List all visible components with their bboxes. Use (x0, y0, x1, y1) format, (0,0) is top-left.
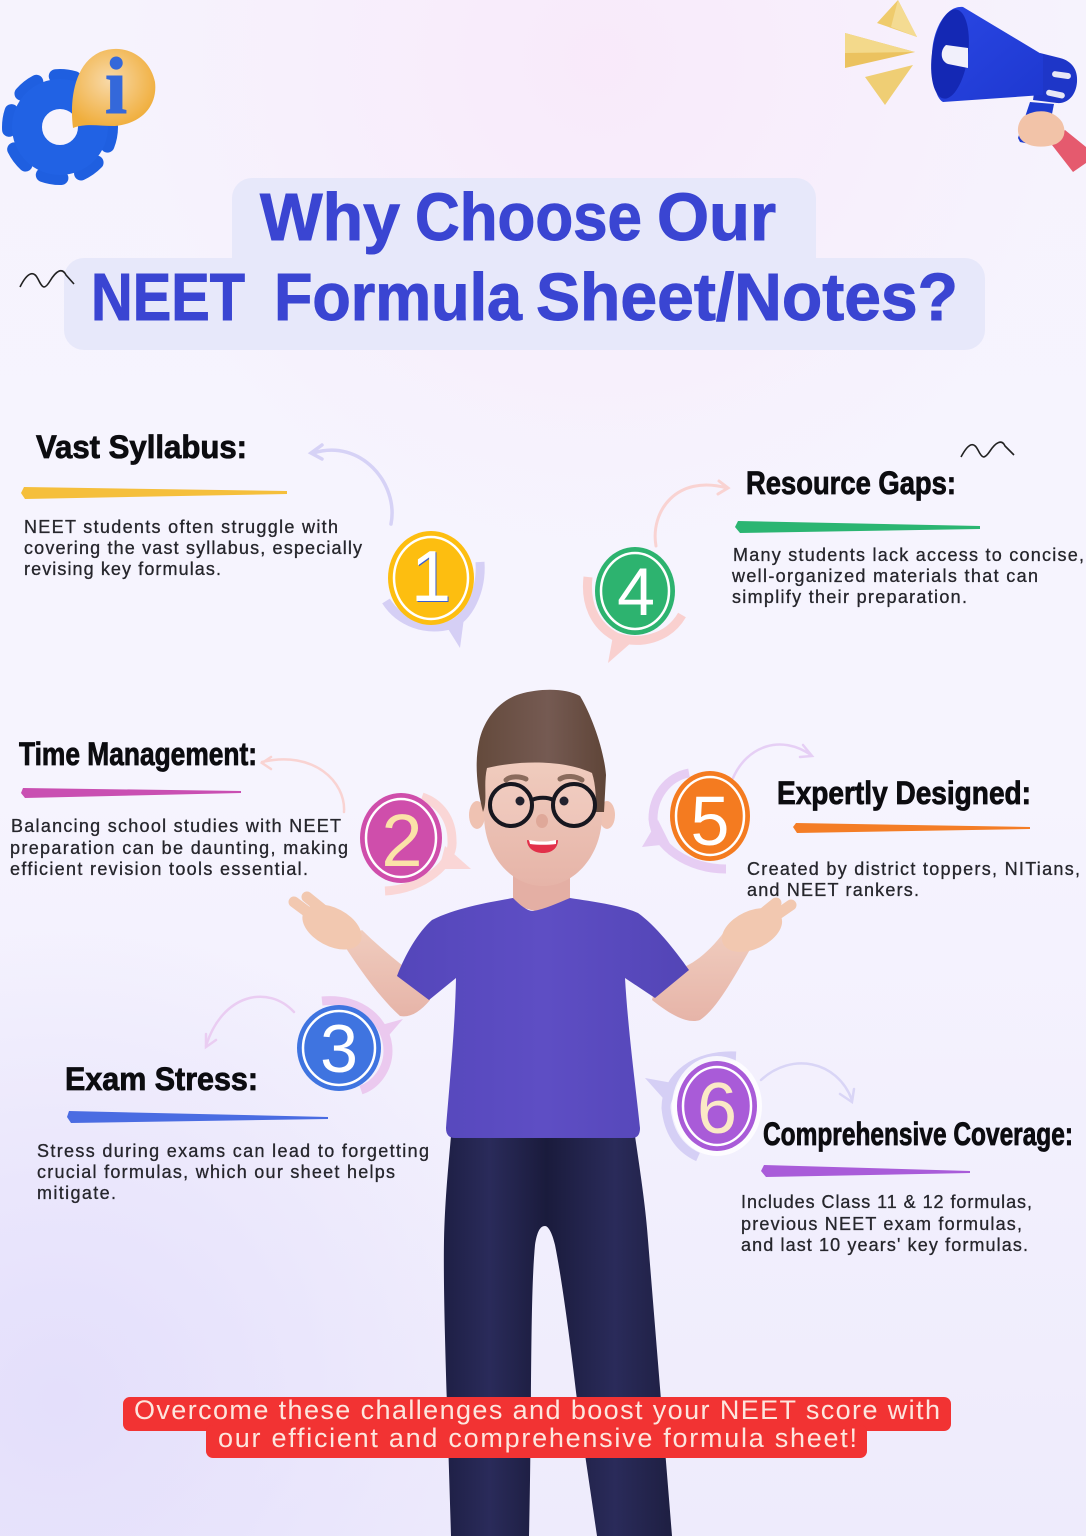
footer banner (123, 1395, 951, 1458)
panel: resource gaps (731, 465, 1084, 607)
badge 4 (587, 547, 682, 663)
underline (21, 788, 241, 798)
heading: Time Management: (19, 736, 257, 772)
title: Why (260, 180, 400, 255)
body text: Stress during exams can lead to forgetting (37, 1141, 429, 1161)
arrow 6 (761, 1063, 854, 1102)
body text: revising key formulas. (24, 559, 221, 579)
mouth (527, 840, 558, 853)
cone (932, 7, 1043, 102)
badge 6 (645, 1056, 762, 1157)
badge 2: 2 (381, 799, 423, 882)
body text: and last 10 years' key formulas. (741, 1235, 1028, 1255)
right arm (652, 932, 752, 1021)
badge 1 (386, 531, 480, 648)
body text: preparation can be daunting, making (10, 838, 348, 858)
panel: exam stress (37, 1061, 429, 1203)
neck (513, 875, 570, 913)
eyes (516, 796, 524, 806)
face (484, 760, 602, 886)
body text: crucial formulas, which our sheet helps (37, 1162, 395, 1182)
heading background pills (64, 178, 985, 350)
handle (1018, 102, 1054, 144)
title: Choose (415, 180, 642, 255)
nose (536, 814, 548, 828)
body text (731, 545, 1084, 607)
badge 4: 4 (617, 554, 655, 630)
title: NEET (91, 260, 245, 335)
eyebrows (506, 776, 582, 780)
icon: gear with info bubble (9, 43, 155, 178)
right hand (715, 899, 791, 961)
body text: Includes Class 11 & 12 formulas, (741, 1192, 1032, 1212)
glasses (490, 784, 595, 826)
title (91, 180, 958, 335)
badge 6: 6 (697, 1069, 737, 1149)
squiggle right (961, 442, 1014, 457)
left hand (294, 895, 369, 959)
panel: time management (10, 736, 348, 879)
ears (469, 801, 485, 829)
body text: well-organized materials that can (731, 566, 1038, 586)
hair (477, 690, 606, 812)
sound rays (845, 0, 917, 105)
icon: gear with info bubble: i (105, 43, 127, 131)
left arm (342, 930, 430, 1016)
arrow 3 (206, 997, 294, 1047)
shirt (397, 898, 689, 1138)
body text: Many students lack access to concise, (733, 545, 1084, 565)
arrow 2 (262, 757, 344, 812)
panel: comprehensive coverage (741, 1116, 1073, 1255)
badge 3 (297, 1001, 403, 1091)
body text (741, 1192, 1032, 1255)
title: Sheet/Notes? (536, 260, 958, 335)
underline (67, 1111, 328, 1123)
underline (793, 823, 1030, 833)
heading: Exam Stress: (65, 1061, 258, 1097)
badge 1: 1 (412, 538, 452, 618)
body text (24, 517, 362, 579)
body text: previous NEET exam formulas, (741, 1214, 1022, 1234)
back section (1033, 53, 1077, 103)
banner text: Overcome these challenges and boost your NEET score with (134, 1395, 940, 1425)
title: Our (657, 180, 776, 255)
arrow 5 (733, 745, 812, 778)
body text: simplify their preparation. (732, 587, 967, 607)
underline (735, 521, 980, 533)
body text (10, 816, 348, 879)
body text: Created by district toppers, NITians, (747, 859, 1080, 879)
heading: Vast Syllabus: (36, 429, 247, 465)
badge 1: 1 (411, 537, 451, 617)
panel: expertly designed (747, 775, 1080, 900)
heading: Resource Gaps: (746, 465, 956, 501)
panel: vast syllabus (21, 429, 362, 579)
banner text (134, 1395, 940, 1453)
squiggle left (20, 271, 74, 287)
body text (37, 1141, 429, 1203)
body text: efficient revision tools essential. (10, 859, 308, 879)
body text (747, 859, 1080, 900)
body text: mitigate. (37, 1183, 116, 1203)
sleeve (1052, 130, 1086, 172)
underline (21, 487, 287, 499)
badge 2 (360, 793, 471, 891)
icon: megaphone with hand (845, 0, 1086, 172)
body text: and NEET rankers. (747, 880, 919, 900)
heading: Expertly Designed: (777, 775, 1031, 811)
banner text: our efficient and comprehensive formula sheet! (218, 1423, 857, 1453)
title: Formula (274, 260, 523, 335)
underline (761, 1165, 970, 1177)
hand (1018, 111, 1064, 147)
body text: NEET students often struggle with (24, 517, 338, 537)
badge 5: 5 (691, 782, 729, 860)
body text: Balancing school studies with NEET (11, 816, 341, 836)
legs (444, 1136, 672, 1536)
badge 3: 3 (320, 1011, 358, 1087)
head (469, 690, 615, 886)
badge 5 (642, 771, 750, 869)
character: student (294, 690, 791, 1536)
body text: covering the vast syllabus, especially (24, 538, 362, 558)
arrow 1 (311, 445, 392, 524)
arrow 4 (655, 481, 728, 546)
